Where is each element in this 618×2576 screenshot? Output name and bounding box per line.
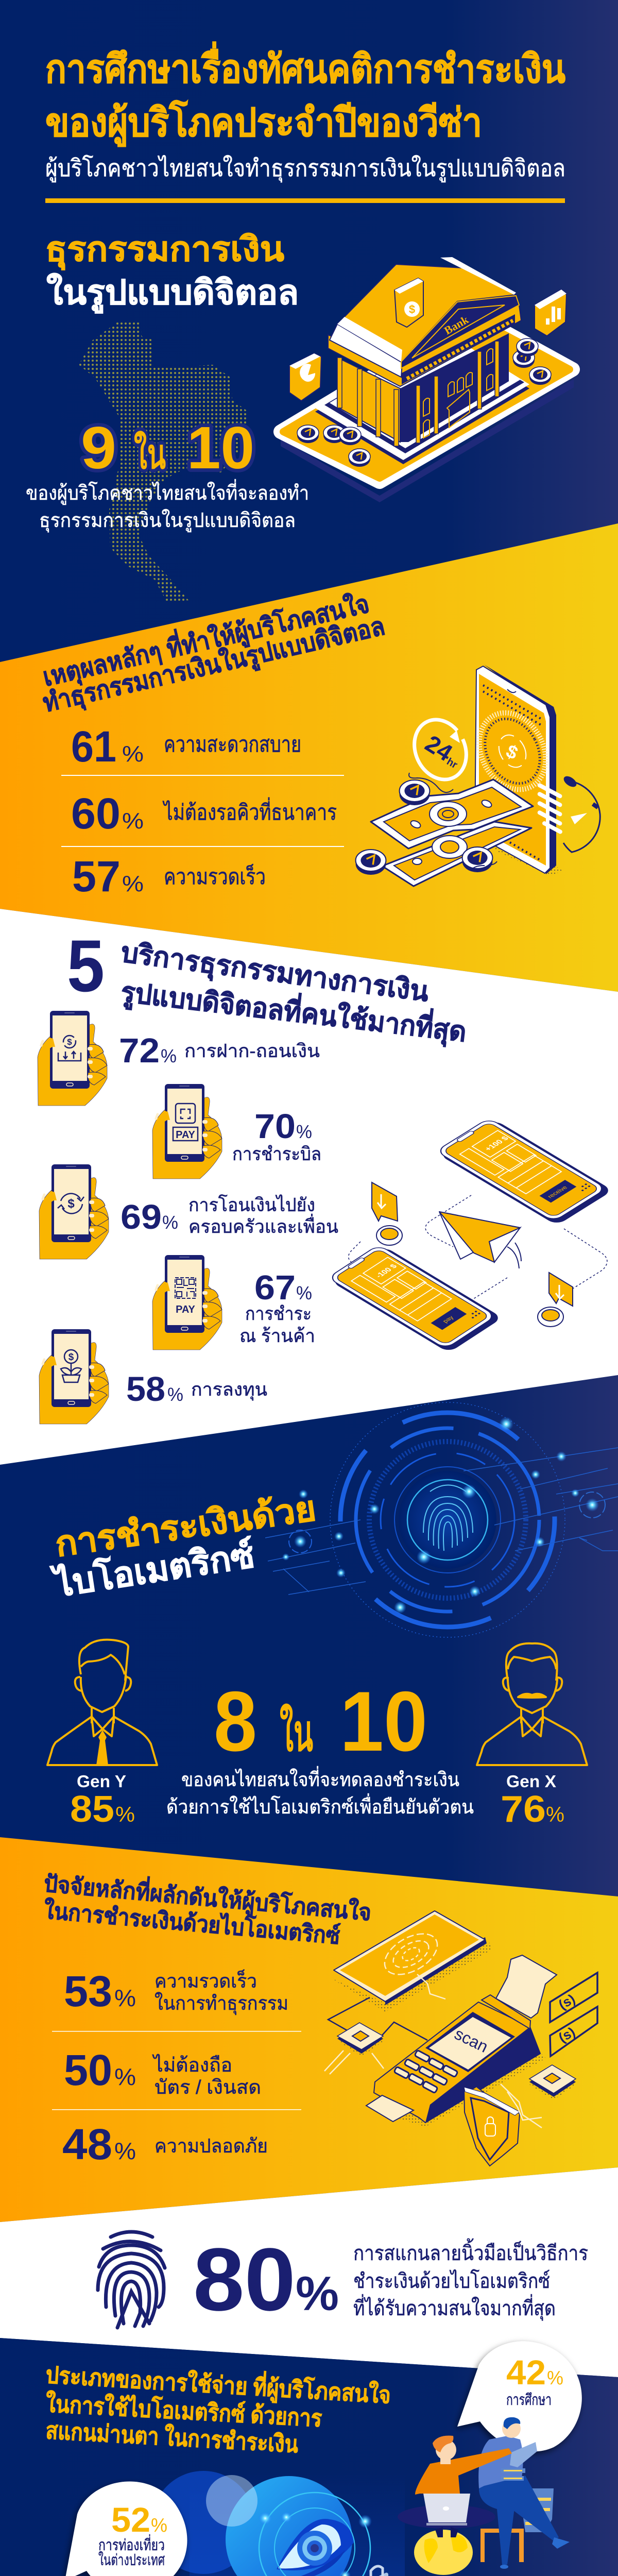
stat: 9 in 10 <box>81 414 254 481</box>
stat row: 57% speed <box>72 852 266 901</box>
illustration: phone, 24hr, banknotes and stopwatch: 24 <box>421 730 457 767</box>
illustration: bank on smartphone: $ <box>409 303 415 316</box>
title <box>45 41 565 147</box>
stat row: 53% speed of transaction: % <box>114 1985 136 2011</box>
illustration: POS terminal, phone with biometric circuit, shield: (s) <box>556 1991 578 2012</box>
stat row: 60% no queue: 60 <box>71 789 121 838</box>
heading: biometric payment <box>49 1489 318 1605</box>
stat: 80% fingerprint scanning <box>193 2229 588 2329</box>
stat row: 53% speed of transaction: ในการทำธุรกรรม <box>154 1992 288 2015</box>
stat row: 53% speed of transaction <box>64 1967 288 2015</box>
heading: digital transactions <box>45 230 299 314</box>
icon: hand with phone, QR merchant payment <box>152 1255 222 1350</box>
stat: 58% investment <box>126 1370 267 1409</box>
stat: 70% bill payment <box>232 1107 321 1164</box>
heading: top 5 services <box>67 925 469 1050</box>
icon: hand with phone, pay bill <box>152 1084 222 1179</box>
stat: 58% investment: 58 <box>126 1370 165 1409</box>
text: 8 in 10 description: ของคนไทยสนใจที่จะทดลองชำระเงิน <box>181 1766 459 1791</box>
heading: biometric payment: ไบโอเมตริกซ์ <box>49 1534 257 1605</box>
stat: 70% bill payment: 70 <box>254 1107 296 1146</box>
stat: 9 in 10: 10 <box>187 414 254 481</box>
stat: 69% transfer to family and friends: 69 <box>121 1198 162 1236</box>
heading: top 5 services: 5 <box>67 925 105 1007</box>
illustration: POS terminal, phone with biometric circuit, shield <box>324 1911 597 2166</box>
heading: biometric driving factors: ในการชำระเงินด้วยไบโอเมตริกซ์ <box>43 1896 341 1949</box>
stat row: 48% security: % <box>114 2138 136 2164</box>
stat: 67% merchant payment: 67 <box>254 1268 296 1307</box>
text: Gen Y 85%: 85 <box>70 1789 114 1830</box>
stat row: 57% speed: ความรวดเร็ว <box>164 864 266 889</box>
text: Gen Y 85%: Gen Y <box>77 1772 126 1791</box>
text: 9 in 10 description <box>26 479 309 533</box>
icon: hand with phone, money transfer <box>39 1164 109 1259</box>
callout: 52% overseas travel: ในต่างประเทศ <box>98 2551 165 2569</box>
heading: biometric driving factors: ปัจจัยหลักที่ผลักดันให้ผู้บริโภคสนใจ <box>43 1867 373 1927</box>
stat row: 57% speed: % <box>122 871 144 896</box>
callout: 42% education: 42 <box>506 2353 546 2392</box>
icon: Gen X man <box>477 1643 587 1765</box>
text: Gen X 76%: % <box>546 1802 564 1826</box>
heading: biometric payment: การชำระเงินด้วย <box>53 1489 318 1564</box>
stat: 67% merchant payment: % <box>296 1282 312 1303</box>
stat: 69% transfer to family and friends: ครอบครัวและเพื่อน <box>188 1214 338 1237</box>
map: dotted Thailand <box>79 320 246 603</box>
illustration: POS terminal, phone with biometric circuit, shield: scan <box>452 2024 491 2056</box>
icon: hand with phone, investment plant <box>39 1329 109 1424</box>
heading: biometric driving factors <box>43 1867 373 1949</box>
stat: 72% deposit withdraw: การฝาก-ถอนเงิน <box>184 1040 320 1061</box>
stat row: 60% no queue: ไม่ต้องรอคิวที่ธนาคาร <box>162 798 337 824</box>
stat: 80% fingerprint scanning: ชำระเงินด้วยไบโอเมตริกซ์ <box>353 2269 550 2293</box>
stat row: 53% speed of transaction: 53 <box>64 1967 112 2015</box>
stat row: 50% no card or cash <box>64 2046 261 2098</box>
stat: 9 in 10: ใน <box>134 430 166 477</box>
icon: hand with phone, investment plant: $ <box>68 1352 74 1363</box>
stat: 80% fingerprint scanning: การสแกนลายนิ้วมือเป็นวิธีการ <box>353 2238 588 2265</box>
stat: 58% investment: % <box>167 1384 183 1405</box>
icon: hand with phone, deposit withdraw <box>38 1011 107 1106</box>
callout: 42% education <box>457 2341 582 2451</box>
heading: spending types: ในการใช้ไบโอเมตริกซ์ ด้วยการ <box>45 2389 323 2432</box>
icon: fingerprint <box>98 2232 165 2328</box>
stat row: 48% security: 48 <box>62 2120 112 2168</box>
stat row: 61% convenience: % <box>122 741 144 767</box>
text: Gen Y 85%: % <box>115 1802 135 1826</box>
stat: 70% bill payment: การชำระบิล <box>232 1143 321 1164</box>
callout: 52% overseas travel: % <box>151 2515 167 2536</box>
text: 9 in 10 description: ธุรกรรมการเงินในรูปแบบดิจิตอล <box>39 509 296 533</box>
stat row: 60% no queue: % <box>122 808 144 834</box>
illustration: phone, 24hr, banknotes and stopwatch: $ <box>503 740 521 764</box>
callout: 42% education: การศึกษา <box>506 2392 552 2409</box>
illustration: phone to phone money transfer with paper plane: receive <box>546 1184 569 1199</box>
stat: 72% deposit withdraw: % <box>161 1045 177 1066</box>
callout: 52% overseas travel: การท่องเที่ยว <box>98 2534 165 2554</box>
callout: 42% education: % <box>547 2367 563 2389</box>
stat: 8 in 10: 10 <box>340 1674 427 1769</box>
stat: 67% merchant payment: การชำระ <box>245 1303 312 1324</box>
stat: 69% transfer to family and friends <box>121 1194 338 1237</box>
band: white fingerprint stat section <box>0 2167 618 2377</box>
illustration: phone, 24hr, banknotes and stopwatch: hr <box>445 756 459 771</box>
illustration: iris scan on smartphone <box>152 2471 415 2576</box>
icon: hand with phone, QR merchant payment: PAY <box>176 1304 196 1315</box>
text: 8 in 10 description: ด้วยการใช้ไบโอเมตริกซ์เพื่อยืนยันตัวตน <box>166 1793 474 1818</box>
stat: 9 in 10: 9 <box>81 414 116 481</box>
stat row: 48% security: ความปลอดภัย <box>154 2136 268 2157</box>
stat row: 61% convenience: 61 <box>71 722 116 771</box>
band: gold reasons section <box>0 523 618 992</box>
title: ของผู้บริโภคประจำปีของวีซ่า <box>45 99 482 147</box>
icon: hand with phone, pay bill: PAY <box>176 1129 196 1141</box>
text: 9 in 10 description: ของผู้บริโภคชาวไทยสนใจที่จะลองทำ <box>26 479 309 505</box>
band: white services section <box>0 909 618 1465</box>
heading: spending types: สแกนม่านตา ในการชำระเงิน <box>45 2416 299 2458</box>
stat: 8 in 10: ใน <box>280 1703 313 1762</box>
illustration: phone to phone money transfer with paper plane <box>327 1117 613 1353</box>
heading: top 5 services: บริการธุรกรรมทางการเงิน <box>119 937 431 1009</box>
stat row: 53% speed of transaction: ความรวดเร็ว <box>154 1969 257 1992</box>
illustration: bank on smartphone: Bank <box>442 313 471 337</box>
band: gold biometric factors section <box>0 1837 618 2222</box>
text: Gen X 76% <box>501 1772 564 1830</box>
illustration: students with laptop and books <box>398 2417 570 2575</box>
text: Gen X 76%: 76 <box>501 1789 546 1830</box>
heading: spending types <box>45 2358 392 2458</box>
stat row: 61% convenience: ความสะดวกสบาย <box>164 732 301 756</box>
stat: 67% merchant payment: ณ ร้านค้า <box>239 1325 315 1346</box>
stat: 8 in 10 <box>214 1674 427 1769</box>
illustration: fingerprint scanner rings <box>265 1402 618 1637</box>
band: navy spending types section <box>0 2338 618 2576</box>
stat: 8 in 10: 8 <box>214 1674 257 1769</box>
stat row: 57% speed: 57 <box>72 852 121 901</box>
stat: 69% transfer to family and friends: การโอนเงินไปยัง <box>188 1194 315 1215</box>
heading: digital transactions: ในรูปแบบดิจิตอล <box>46 272 299 314</box>
stat row: 61% convenience <box>71 722 301 771</box>
stat row: 50% no card or cash: บัตร / เงินสด <box>154 2077 261 2098</box>
illustration: bank on smartphone <box>281 257 574 502</box>
heading: main reasons: ทำธุรกรรมการเงินในรูปแบบดิจิตอล <box>40 611 388 719</box>
illustration: POS terminal, phone with biometric circuit, shield: (s) <box>556 2024 578 2045</box>
icon: hand with phone, money transfer: $ <box>67 1197 75 1211</box>
stat row: 60% no queue <box>71 789 337 838</box>
stat: 80% fingerprint scanning: ที่ได้รับความสนใจมากที่สุด <box>353 2294 556 2321</box>
illustration: phone to phone money transfer with paper plane: +100 $ <box>483 1135 511 1152</box>
stat: 72% deposit withdraw: 72 <box>119 1031 160 1070</box>
illustration: phone, 24hr, banknotes and stopwatch <box>356 665 600 886</box>
stat: 70% bill payment: % <box>296 1121 312 1142</box>
callout: 52% overseas travel: 52 <box>111 2501 150 2539</box>
heading: top 5 services: รูปแบบดิจิตอลที่คนใช้มากที่สุด <box>119 972 469 1050</box>
title: การศึกษาเรื่องทัศนคติการชำระเงิน <box>45 41 565 91</box>
stat: 72% deposit withdraw <box>119 1031 320 1070</box>
text: Gen Y 85% <box>70 1772 135 1830</box>
text: 8 in 10 description <box>166 1766 474 1818</box>
stat: 58% investment: การลงทุน <box>191 1379 267 1401</box>
stat row: 48% security <box>62 2120 268 2168</box>
text: Gen X 76%: Gen X <box>506 1772 556 1791</box>
stat: 80% fingerprint scanning: 80 <box>193 2229 296 2329</box>
heading: digital transactions: ธุรกรรมการเงิน <box>45 230 284 270</box>
icon: Gen Y man <box>47 1640 157 1765</box>
stat row: 50% no card or cash: 50 <box>64 2046 112 2094</box>
heading: spending types: ประเภทของการใช้จ่าย ที่ผู้บริโภคสนใจ <box>45 2358 392 2410</box>
heading: main reasons: เหตุผลหลักๆ ที่ทำให้ผู้บริโภคสนใจ <box>39 586 372 693</box>
icon: hand with phone, deposit withdraw: $ <box>67 1037 72 1047</box>
stat row: 50% no card or cash: % <box>114 2063 136 2090</box>
callout: 52% overseas travel <box>65 2481 187 2576</box>
stat row: 50% no card or cash: ไม่ต้องถือ <box>152 2054 232 2076</box>
stat: 69% transfer to family and friends: % <box>162 1212 178 1233</box>
subtitle: ผู้บริโภคชาวไทยสนใจทำธุรกรรมการเงินในรูปแบบดิจิตอล <box>45 155 565 183</box>
stat: 80% fingerprint scanning: % <box>296 2266 339 2320</box>
illustration: phone to phone money transfer with paper plane: pay <box>441 1315 455 1324</box>
stat: 67% merchant payment <box>239 1268 315 1346</box>
illustration: phone to phone money transfer with paper plane: -100 $ <box>374 1263 399 1279</box>
